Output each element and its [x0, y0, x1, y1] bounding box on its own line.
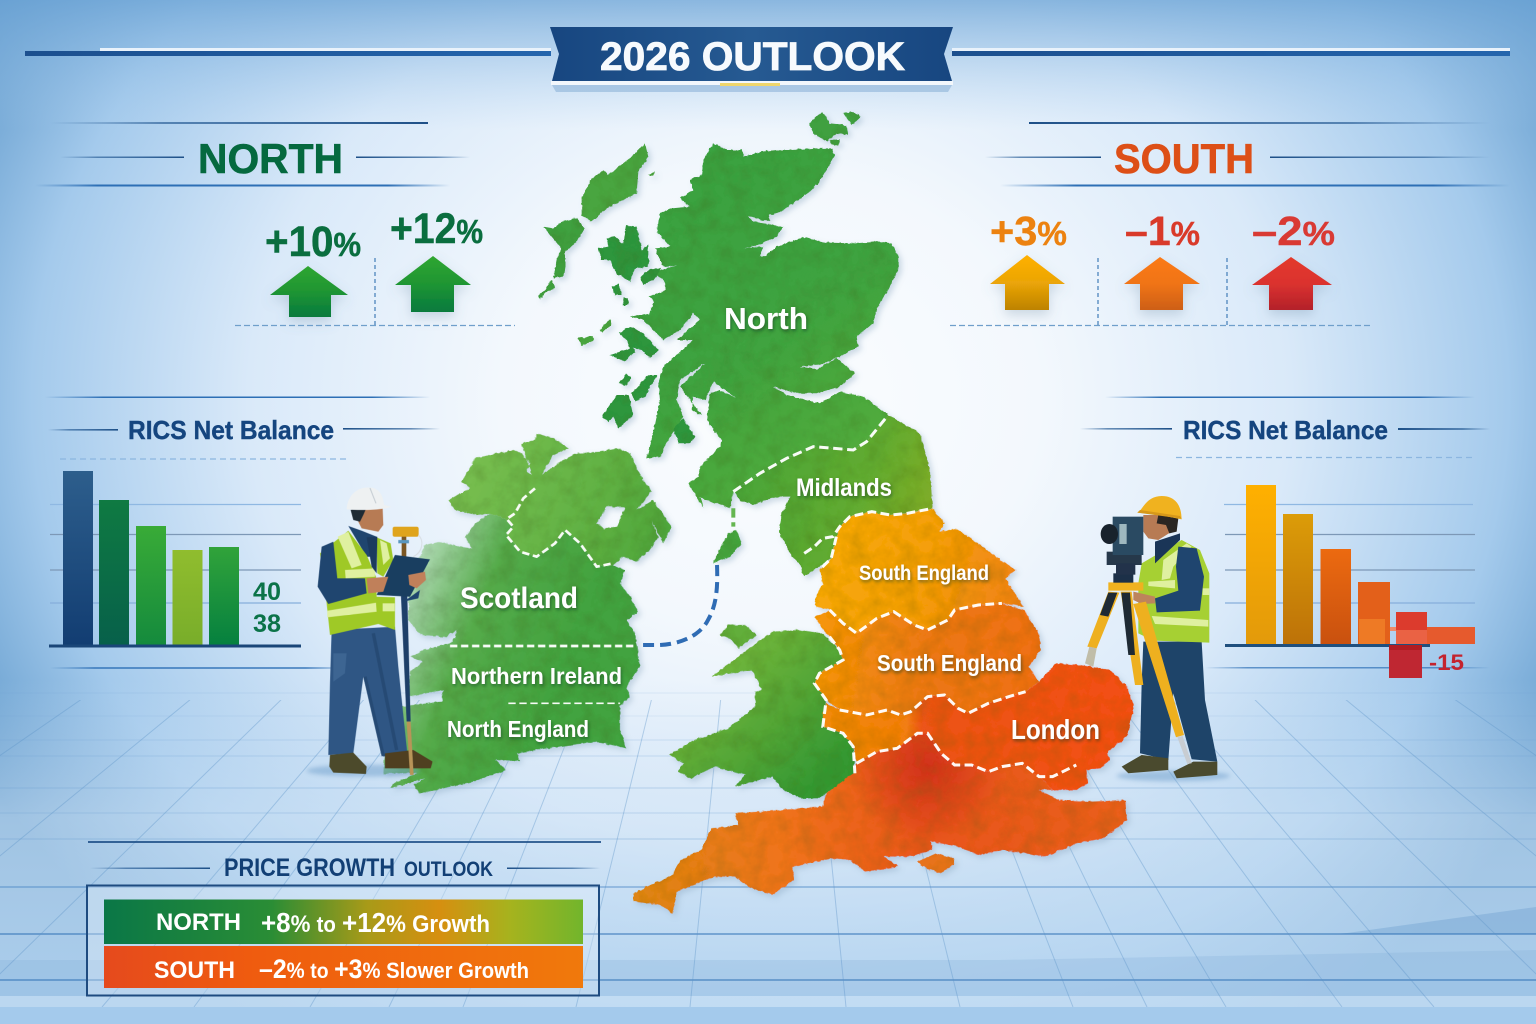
legend row: south: SOUTH [154, 957, 235, 984]
map: british isles [383, 112, 1134, 913]
title banner [550, 27, 953, 92]
gnss pole [393, 527, 422, 775]
land borders [450, 415, 1076, 777]
map labels: North England [447, 716, 589, 742]
bar chart [1225, 485, 1475, 678]
legend heading: OUTLOOK [404, 858, 493, 881]
bar chart [63, 471, 239, 646]
stat: +12%: +12% [390, 205, 483, 253]
total station tripod [1085, 517, 1192, 764]
title text: 2026 OUTLOOK [600, 35, 905, 79]
chart heading: RICS Net Balance [1183, 415, 1388, 445]
legend row: south [104, 946, 583, 988]
value labels: 38 [253, 610, 281, 638]
value labels [253, 578, 281, 638]
legend row: north [104, 900, 583, 944]
heading: north: NORTH [198, 135, 343, 182]
arrow: +12% [395, 256, 471, 312]
heading: south: SOUTH [1114, 135, 1254, 182]
region: midlands [733, 415, 933, 577]
value label: -15 [1429, 650, 1464, 675]
arrow: +3% [990, 255, 1065, 310]
surveyor right [1085, 496, 1230, 781]
stat: -2%: –2% [1252, 208, 1335, 254]
map labels: Scotland [460, 582, 578, 615]
panel: south outlook [950, 122, 1510, 326]
panel: north outlook [35, 122, 515, 326]
arrow: -1% [1124, 257, 1200, 310]
top rule [25, 48, 1510, 56]
map labels: South England [859, 562, 989, 585]
legend row: north: NORTH [156, 909, 241, 936]
stat: +3%: +3% [990, 208, 1067, 254]
arrow: +10% [270, 266, 348, 317]
legend row: north: +8% to +12% Growth [261, 907, 490, 938]
map labels: Midlands [796, 474, 892, 502]
region: england and wales [634, 508, 1134, 913]
legend row: south: –2% to +3% Slower Growth [259, 954, 529, 984]
map labels: North [724, 301, 808, 336]
map labels: South England [877, 650, 1022, 676]
arrow: -2% [1252, 257, 1332, 310]
legend heading: PRICE GROWTH [224, 854, 395, 882]
panel: rics chart north [45, 396, 440, 669]
region: scotland [538, 112, 933, 577]
value labels: 40 [253, 578, 281, 606]
connector: dashed link across the irish sea [638, 565, 717, 645]
surveyor left [307, 487, 433, 777]
map labels [447, 301, 1100, 745]
panel: rics chart south [1080, 396, 1490, 678]
chart heading: RICS Net Balance [128, 415, 334, 445]
region: ireland [383, 433, 672, 793]
map labels: London [1011, 714, 1100, 745]
map land masses [383, 112, 1134, 913]
map labels: Northern Ireland [451, 663, 622, 689]
panel: price growth outlook legend [87, 841, 601, 996]
stat: -1%: –1% [1125, 208, 1200, 254]
stat: +10%: +10% [265, 218, 361, 266]
